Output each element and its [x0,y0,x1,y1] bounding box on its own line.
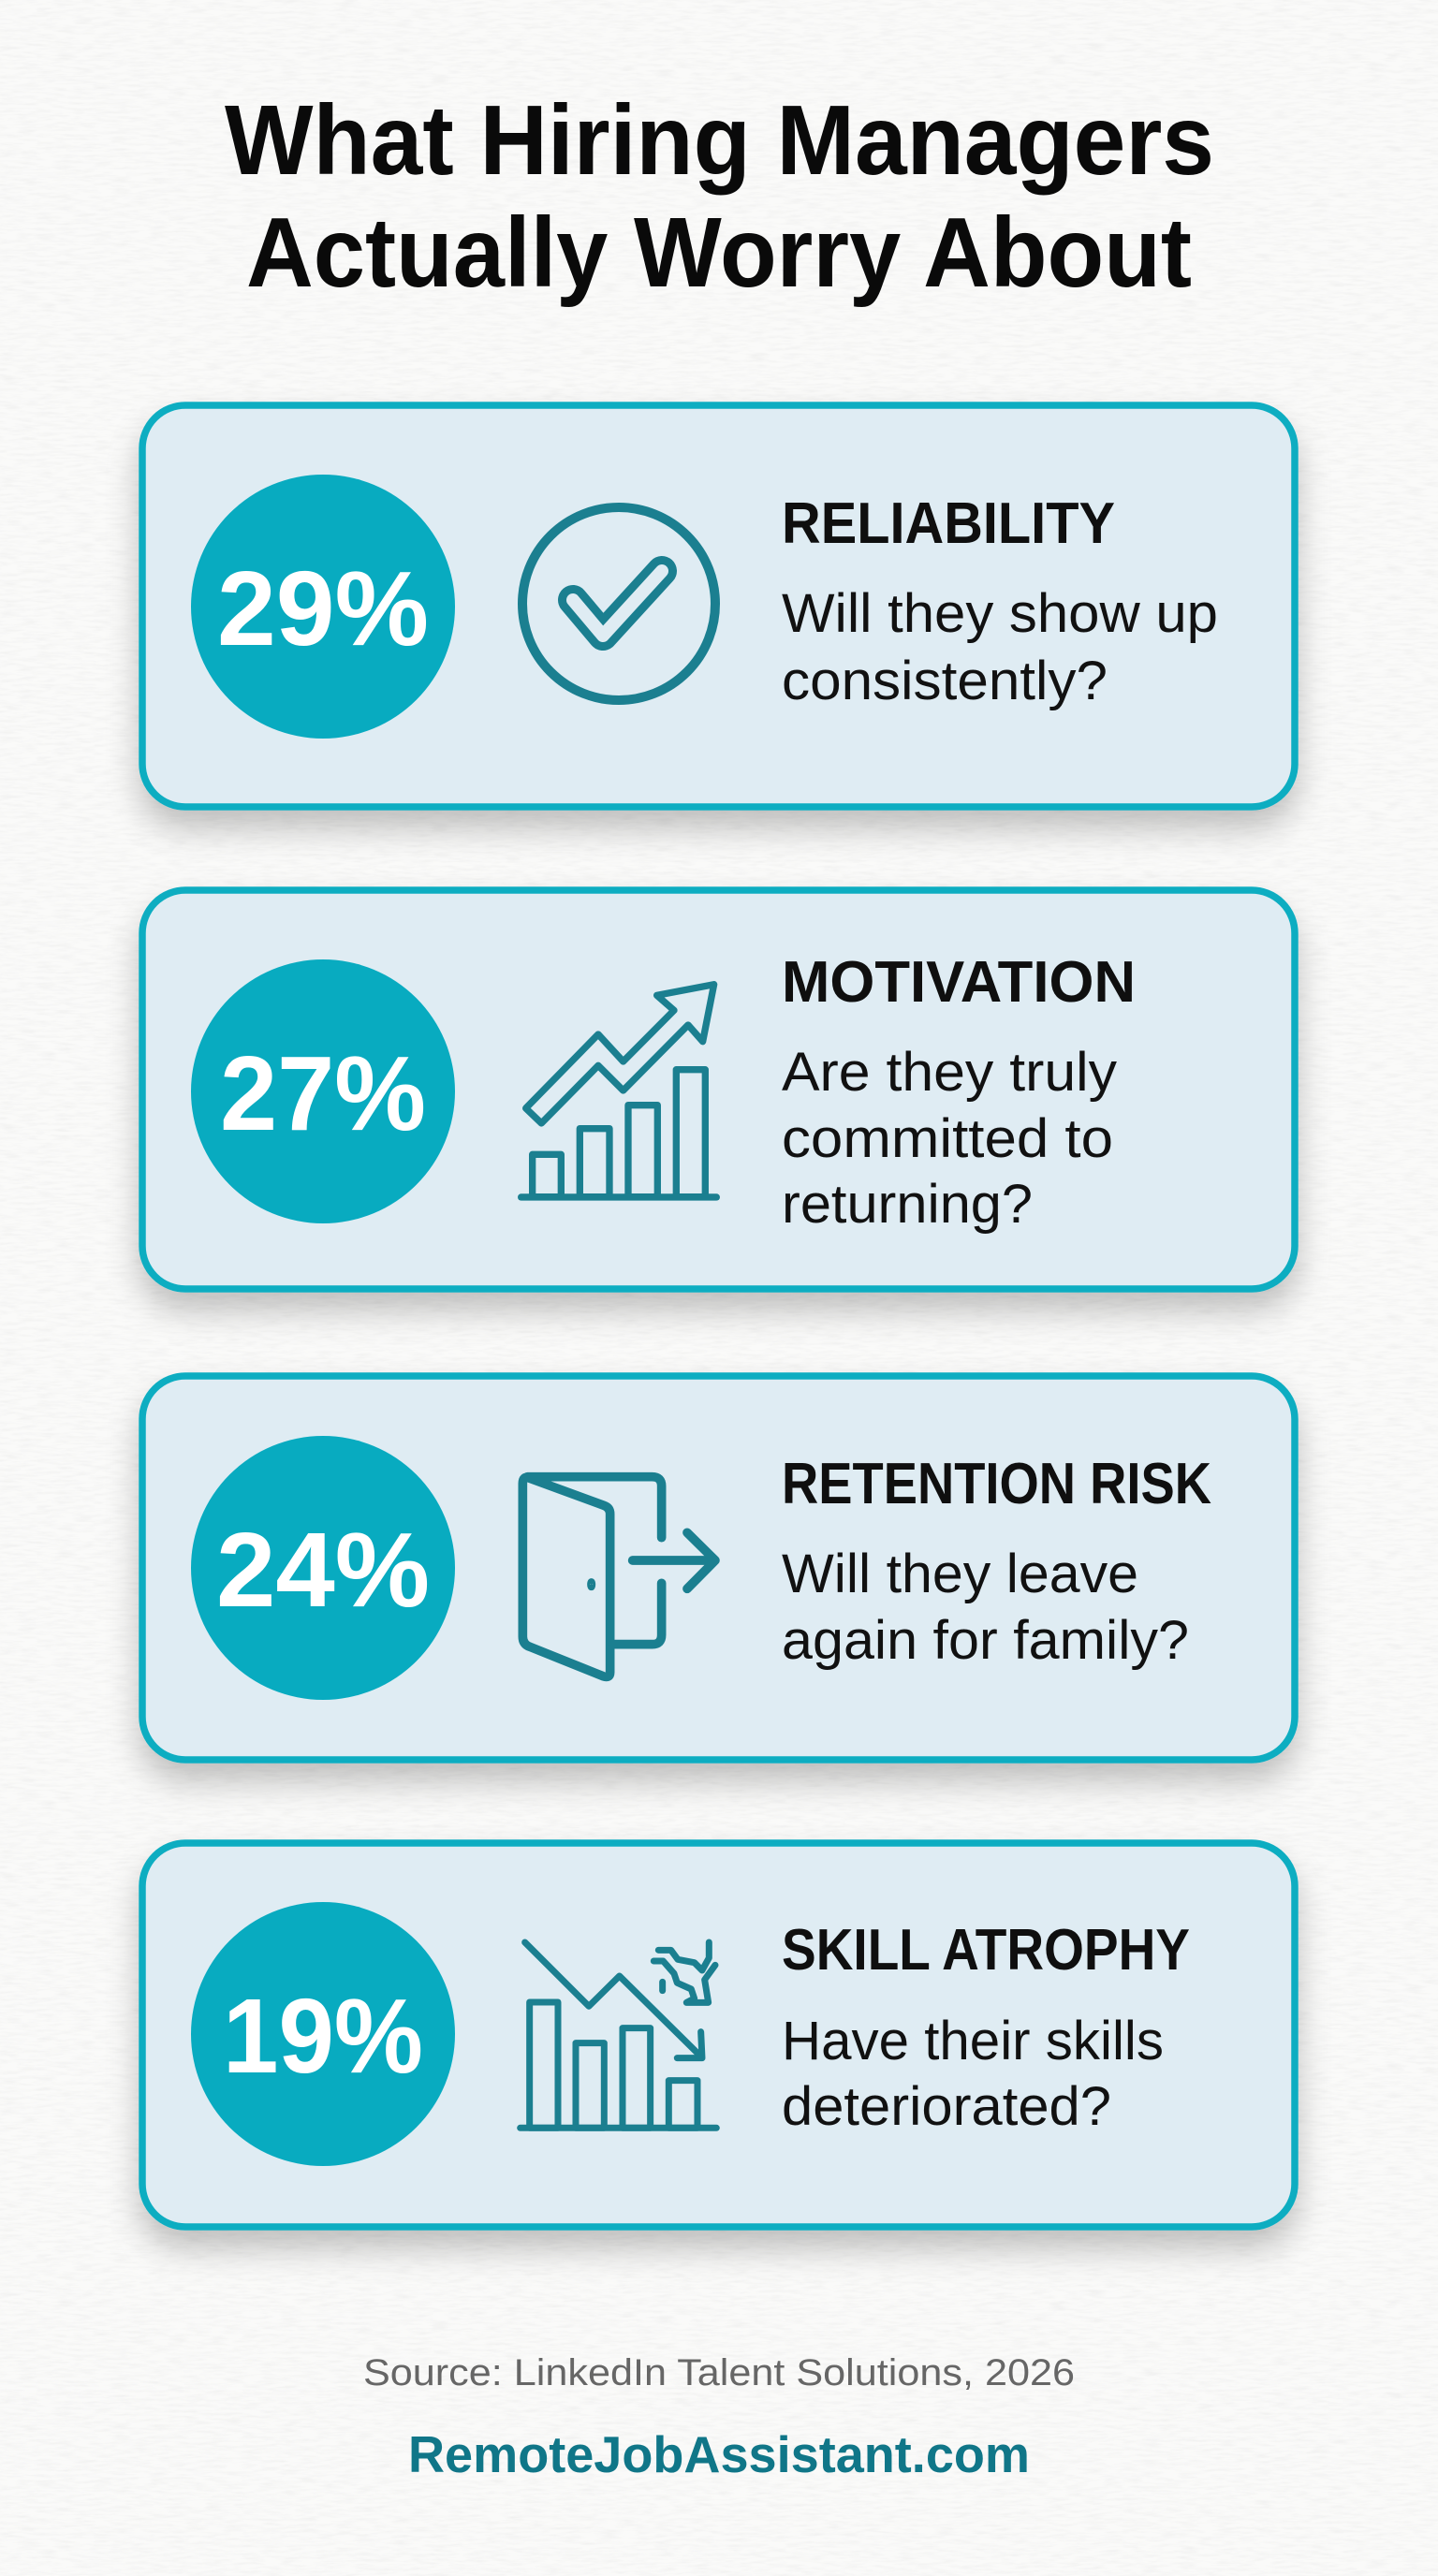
text: retention risk [782,1452,1211,1671]
icon: rising bar chart with arrow [521,985,716,1197]
icon: check mark in circle [522,507,715,700]
text: motivation: committed to [782,1108,1113,1169]
percent badge: 24%: 24% [216,1511,430,1629]
percent badge: 24% [191,1436,455,1700]
card background [142,890,1295,1289]
card background [142,405,1295,807]
text: skill atrophy: Have their skills [782,2011,1164,2071]
text: retention risk: RETENTION RISK [782,1452,1211,1516]
source note: Source: LinkedIn Talent Solutions, 2026 [363,2352,1075,2393]
text: skill atrophy: SKILL ATROPHY [782,1918,1190,1983]
text: reliability [782,491,1218,711]
percent badge: 27%: 27% [220,1034,426,1152]
panel: motivation [142,890,1295,1289]
panel: retention risk [142,1376,1295,1760]
text: reliability: consistently? [782,651,1108,711]
text: motivation [782,950,1136,1235]
text: reliability: Will they show up [782,583,1218,644]
title: What Hiring Managers [225,85,1214,196]
icon: open door with exit arrow [522,1477,715,1676]
text: retention risk: Will they leave [782,1544,1138,1604]
percent badge: 29%: 29% [217,549,429,667]
text: motivation: MOTIVATION [782,950,1136,1015]
text: motivation: returning? [782,1174,1033,1235]
text: retention risk: again for family? [782,1610,1189,1671]
percent badge: 19%: 19% [223,1977,423,2095]
text: motivation: Are they truly [782,1042,1117,1103]
panel: reliability [142,405,1295,807]
percent badge: 19% [191,1902,455,2166]
title [225,85,1214,308]
panel: skill atrophy [142,1843,1295,2227]
text: reliability: RELIABILITY [782,491,1115,556]
title: Actually Worry About [246,198,1192,308]
card background [142,1843,1295,2227]
percent badge: 29% [191,475,455,739]
percent badge: 27% [191,959,455,1223]
website link: RemoteJobAssistant.com [408,2425,1030,2483]
card background [142,1376,1295,1760]
text: skill atrophy: deteriorated? [782,2076,1111,2137]
text: skill atrophy [782,1918,1190,2137]
icon: falling bar chart with crumbling skill [521,1942,716,2128]
